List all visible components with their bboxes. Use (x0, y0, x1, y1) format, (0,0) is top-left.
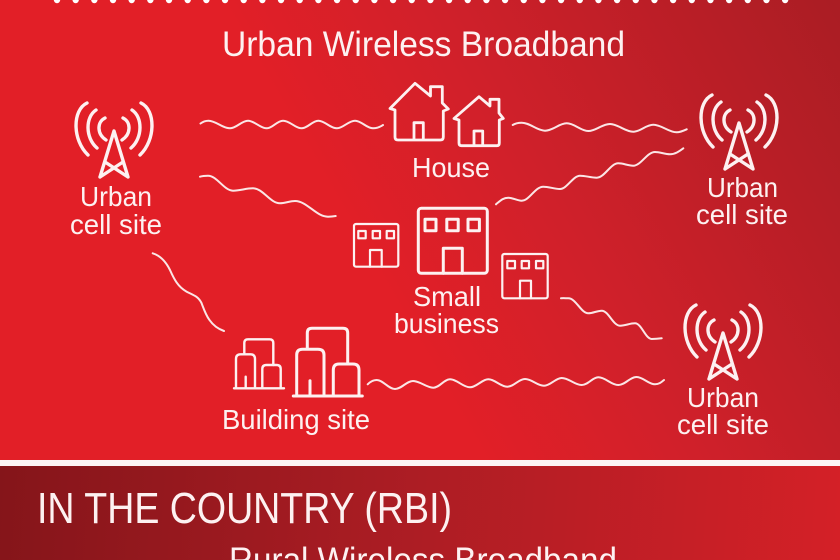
label: house: House (412, 152, 490, 183)
icon: cell tower bottom right (685, 305, 761, 379)
label: urban cell site bottom right (677, 382, 769, 440)
label: urban cell site bottom right: Urban (687, 382, 759, 413)
label: urban cell site bottom right: cell site (677, 409, 769, 440)
signal wave: left tower to building site (153, 253, 224, 331)
icon: large tower block group (293, 328, 362, 396)
label: urban cell site top right: cell site (696, 199, 788, 230)
label: urban cell site left (70, 181, 162, 240)
divider band (0, 460, 840, 466)
signal wave: left tower to house (200, 121, 383, 128)
label: small business: business (394, 308, 499, 339)
signal wave: building site to bottom right tower (368, 377, 664, 389)
heading: in the country: IN THE COUNTRY (RBI) (37, 484, 452, 533)
icon: small tower block group (234, 339, 284, 388)
icon: small house (454, 97, 503, 146)
icon: small business buildings (354, 208, 548, 298)
icon: large office (418, 208, 487, 273)
signal wave: house to top right tower (513, 123, 687, 132)
heading: Urban Wireless Broadband: Urban Wireless Broadband (222, 25, 625, 64)
label: building site: Building site (222, 404, 370, 435)
icon: large house (390, 83, 448, 140)
icon: cell tower top right (701, 95, 777, 169)
label: small business: Small (413, 281, 481, 312)
label: small business (394, 281, 499, 339)
signal wave: small business to bottom right tower (561, 298, 662, 339)
dotted top edge (57, 0, 786, 3)
signal wave: small business to top right tower (496, 148, 683, 204)
panel: country background (0, 466, 840, 560)
icon: building site (234, 328, 362, 396)
icon: houses (390, 83, 503, 146)
icon: left office (354, 224, 398, 267)
icon: right office (502, 254, 548, 298)
signal wave: left tower to small business (200, 176, 336, 217)
label: urban cell site top right: Urban (707, 172, 778, 203)
label: urban cell site left: Urban (80, 181, 152, 212)
label: urban cell site left: cell site (70, 209, 162, 240)
label: urban cell site top right (696, 172, 788, 230)
icon: cell tower left (76, 103, 152, 177)
